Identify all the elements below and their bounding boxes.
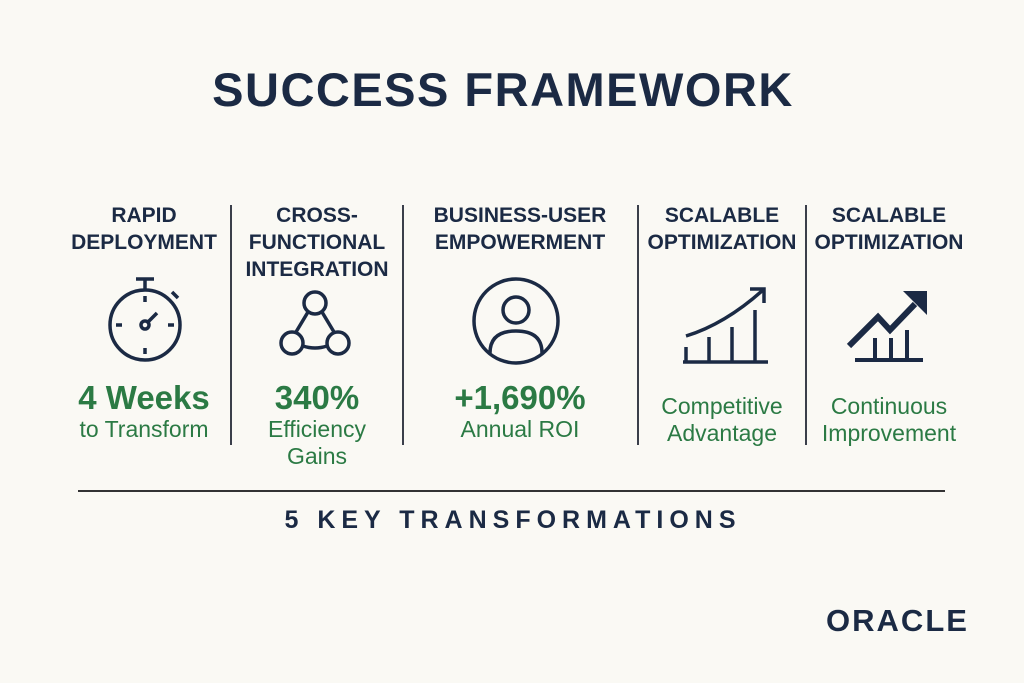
stat 3 bbox=[454, 379, 586, 442]
stat 1: to Transform bbox=[79, 416, 209, 442]
icon: trend arrow chart bbox=[846, 291, 927, 362]
stat 5: Continuous bbox=[831, 393, 947, 419]
column 1: rapid deployment bbox=[71, 204, 217, 254]
stat 4: Advantage bbox=[667, 420, 777, 446]
stat 2: 340% bbox=[275, 379, 359, 416]
title: SUCCESS FRAMEWORK bbox=[212, 63, 794, 116]
stat 2: Efficiency bbox=[268, 416, 366, 442]
column 2 heading: FUNCTIONAL bbox=[249, 231, 385, 254]
column 2 heading: CROSS- bbox=[276, 204, 358, 227]
stat 4 bbox=[661, 393, 783, 446]
stat 5: Improvement bbox=[822, 420, 956, 446]
column 5 heading: SCALABLE bbox=[832, 204, 946, 227]
icon: network bbox=[279, 290, 351, 356]
heading: DEPLOYMENT bbox=[71, 231, 217, 254]
column 2 heading bbox=[245, 204, 389, 281]
stat 1 bbox=[78, 379, 210, 442]
heading bbox=[71, 204, 217, 254]
stat 3: +1,690% bbox=[454, 379, 586, 416]
icon: user bbox=[472, 277, 560, 365]
column 4 heading: OPTIMIZATION bbox=[648, 231, 796, 254]
column 3 heading: EMPOWERMENT bbox=[435, 231, 605, 254]
logo: oracle: ORACLE bbox=[826, 603, 969, 638]
stat 3: Annual ROI bbox=[461, 416, 579, 442]
stat 2 bbox=[268, 379, 366, 469]
column 2 heading: INTEGRATION bbox=[245, 258, 389, 281]
heading: RAPID bbox=[111, 204, 177, 227]
column 3 heading: BUSINESS-USER bbox=[434, 204, 606, 227]
stat 2: Gains bbox=[287, 443, 347, 469]
column 5 heading bbox=[815, 204, 963, 254]
column 4 heading bbox=[648, 204, 796, 254]
icon: stopwatch bbox=[108, 277, 182, 362]
column 4 heading: SCALABLE bbox=[665, 204, 779, 227]
stat 1: 4 Weeks bbox=[78, 379, 210, 416]
stat 4: Competitive bbox=[661, 393, 783, 419]
column 5 heading: OPTIMIZATION bbox=[815, 231, 963, 254]
stat 5 bbox=[822, 393, 956, 446]
icon: growth curve chart bbox=[683, 287, 768, 364]
footer caption: 5 KEY TRANSFORMATIONS bbox=[284, 506, 742, 534]
column 3 heading bbox=[434, 204, 606, 254]
